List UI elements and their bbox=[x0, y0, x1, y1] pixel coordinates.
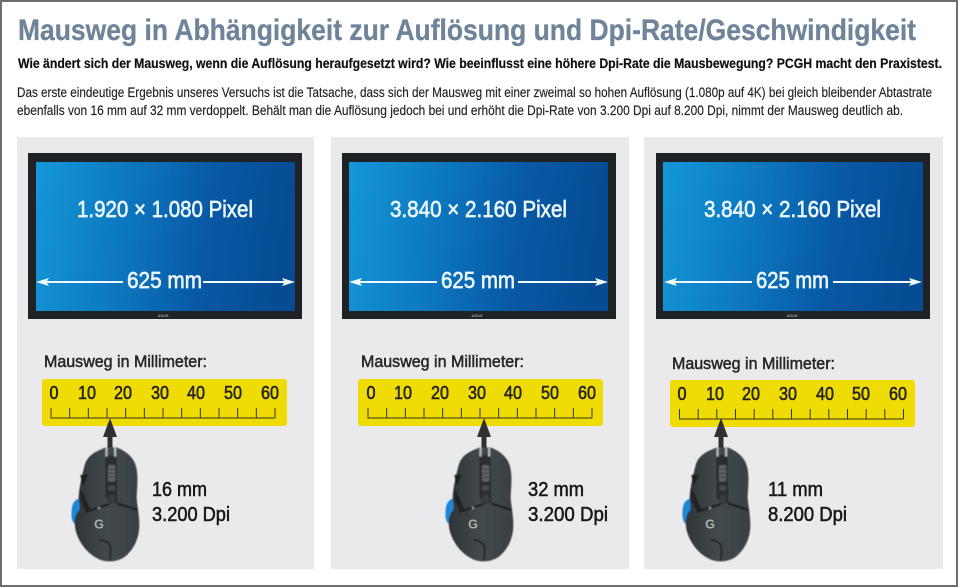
ruler: 10 bbox=[394, 383, 412, 403]
arrow bbox=[714, 418, 728, 448]
ruler: 60 bbox=[889, 384, 907, 404]
ruler: 30 bbox=[151, 383, 169, 403]
ruler: 10 bbox=[78, 383, 96, 403]
ruler: 0 bbox=[366, 383, 376, 403]
ruler: 50 bbox=[852, 384, 870, 404]
ruler label: Mausweg in Millimeter: bbox=[44, 352, 207, 371]
result values: 8.200 Dpi bbox=[768, 504, 847, 526]
ruler: 50 bbox=[541, 383, 559, 403]
monitor: 625 mm bbox=[127, 267, 202, 293]
ruler bbox=[670, 380, 915, 427]
intro text bbox=[17, 85, 932, 118]
monitor: 625 mm bbox=[756, 267, 829, 293]
ruler: 0 bbox=[678, 384, 686, 404]
ruler: 20 bbox=[114, 383, 132, 403]
arrow bbox=[477, 418, 491, 448]
result values: 32 mm bbox=[528, 479, 584, 501]
ruler: 0 bbox=[50, 383, 58, 403]
monitor bbox=[28, 153, 302, 319]
ruler: 10 bbox=[706, 384, 724, 404]
monitor: 3.840 × 2.160 Pixel bbox=[704, 196, 881, 222]
ruler: 20 bbox=[742, 384, 760, 404]
ruler: 50 bbox=[224, 383, 242, 403]
monitor: 625 mm bbox=[441, 267, 515, 293]
result values bbox=[528, 479, 608, 526]
ruler: 60 bbox=[578, 383, 596, 403]
ruler: 30 bbox=[468, 383, 486, 403]
ruler: 40 bbox=[187, 383, 205, 403]
monitor bbox=[656, 153, 930, 319]
panel: 1920 x 1080 at 3200 dpi bbox=[17, 137, 314, 569]
mouse bbox=[445, 447, 513, 561]
monitor: 1.920 × 1.080 Pixel bbox=[77, 196, 253, 222]
panel: 3840 x 2160 at 3200 dpi bbox=[331, 137, 629, 569]
monitor: ASUS bbox=[471, 313, 483, 318]
arrow bbox=[103, 418, 117, 448]
panel: 3840 x 2160 at 8200 dpi bbox=[644, 137, 943, 569]
result values bbox=[152, 479, 230, 526]
result values bbox=[768, 479, 847, 526]
ruler label: Mausweg in Millimeter: bbox=[361, 352, 524, 371]
ruler label: Mausweg in Millimeter: bbox=[672, 354, 835, 373]
ruler bbox=[42, 379, 287, 426]
mouse bbox=[71, 447, 139, 561]
result values: 3.200 Dpi bbox=[528, 504, 608, 526]
ruler: 20 bbox=[431, 383, 449, 403]
result values: 11 mm bbox=[768, 479, 823, 501]
monitor: 3.840 × 2.160 Pixel bbox=[390, 196, 567, 222]
ruler: 40 bbox=[504, 383, 522, 403]
ruler: 30 bbox=[779, 384, 797, 404]
mouse bbox=[682, 447, 750, 561]
monitor bbox=[342, 153, 616, 319]
monitor: ASUS bbox=[157, 313, 169, 318]
ruler bbox=[358, 379, 603, 426]
result values: 3.200 Dpi bbox=[152, 504, 230, 526]
result values: 16 mm bbox=[152, 479, 207, 501]
ruler: 60 bbox=[261, 383, 279, 403]
monitor: ASUS bbox=[786, 313, 798, 318]
ruler: 40 bbox=[816, 384, 834, 404]
